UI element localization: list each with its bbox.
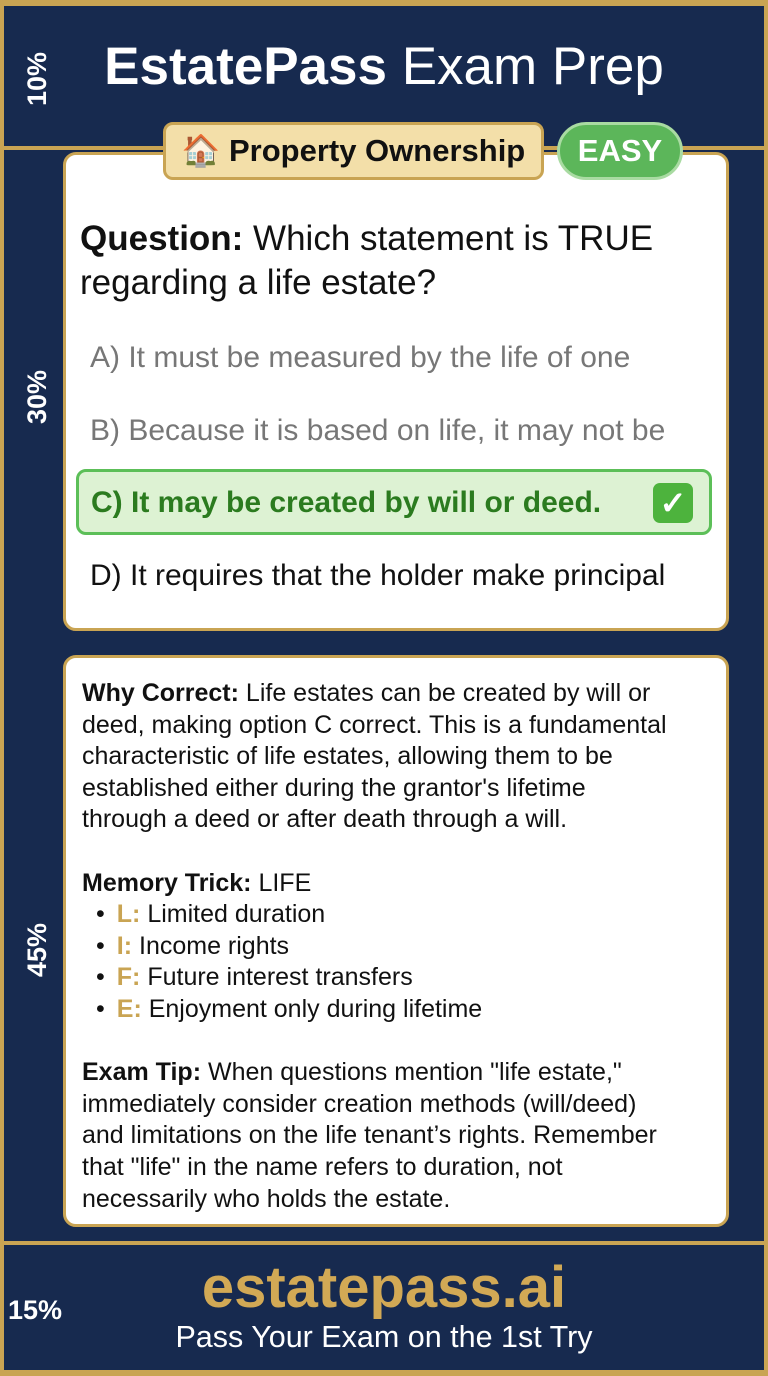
badge: easy: EASY [578, 133, 662, 168]
footer tagline: Pass Your Exam on the 1st Try [175, 1320, 593, 1354]
footer brand: estatepass.ai [202, 1255, 566, 1320]
option B: B) Because it is based on life, it may not be [90, 414, 665, 447]
panel: explanation: and limitations on the life tenant’s rights. Remember [82, 1121, 657, 1149]
panel: explanation: E: Enjoyment only during lifetime [117, 995, 482, 1023]
badge: easy [557, 122, 683, 180]
option D: D) It requires that the holder make principal [90, 559, 665, 592]
panel: explanation [63, 655, 729, 1227]
title: EstatePass Exam Prep [104, 37, 664, 96]
option C correct [76, 469, 712, 535]
option A: A) It must be measured by the life of one [90, 341, 630, 374]
panel: explanation: that "life" in the name refers to duration, not [82, 1153, 563, 1181]
panel: explanation: characteristic of life estates, allowing them to be [82, 742, 613, 770]
panel: explanation: L: Limited duration [117, 900, 325, 928]
icon: check [653, 483, 693, 523]
question text: Question: Which statement is TRUE regarding a life estate? [80, 219, 653, 302]
panel: explanation: necessarily who holds the estate. [82, 1184, 450, 1212]
badge: category: 🏠 Property Ownership [182, 133, 525, 168]
label: 15%: 15% [8, 1295, 62, 1325]
option C correct: C) It may be created by will or deed. [91, 486, 601, 519]
panel: explanation: Exam Tip: When questions mention "life estate," [82, 1058, 622, 1086]
panel: explanation: through a deed or after death through a will. [82, 805, 567, 833]
panel: explanation: deed, making option C correct. This is a fundamental [82, 711, 667, 739]
label: 10%: 10% [22, 52, 52, 106]
label: 30%: 30% [22, 370, 52, 424]
panel: explanation: I: Income rights [117, 932, 289, 960]
panel: question [63, 152, 729, 631]
panel: explanation: established either during the grantor's lifetime [82, 774, 586, 802]
label: 45%: 45% [22, 923, 52, 977]
panel: explanation: immediately consider creation methods (will/deed) [82, 1090, 636, 1118]
panel: explanation: F: Future interest transfers [117, 963, 413, 991]
panel: explanation: Why Correct: Life estates can be created by will or [82, 679, 650, 707]
icon: check: ✓ [660, 485, 686, 521]
badge: category [163, 122, 544, 180]
panel: explanation: Memory Trick: LIFE [82, 869, 311, 897]
